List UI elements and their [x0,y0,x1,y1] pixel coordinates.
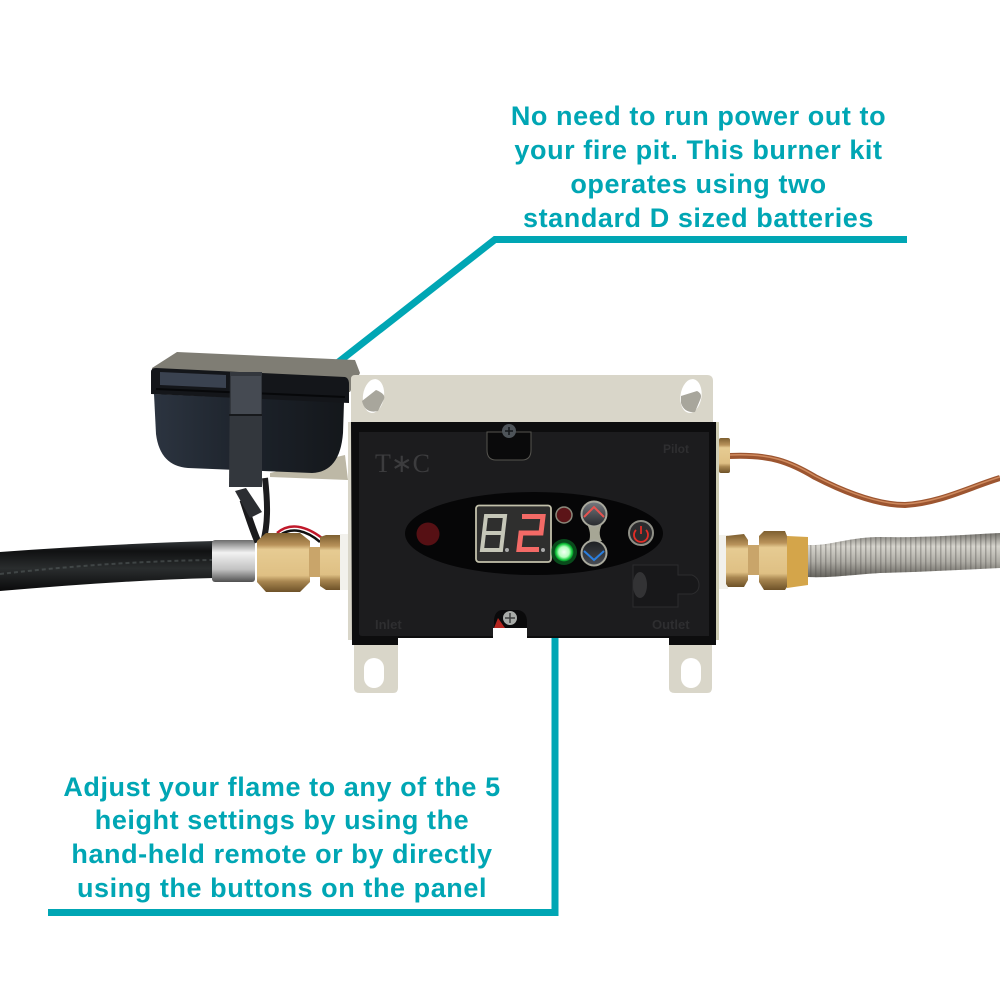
control panel housing [351,422,716,645]
callout text: batteries [511,101,886,233]
flexible stainless outlet line [808,533,1000,577]
control oval [405,492,663,575]
callout text: batteries: No need to run power out to [511,101,886,131]
rubber cover plug [633,565,699,607]
callout text: flame height: height settings by using the [95,805,469,835]
callout text: flame height: hand-held remote or by directly [71,839,493,869]
embossed logo and port labels: T∗C [375,449,430,478]
embossed logo and port labels [375,442,690,632]
small indicator light [556,507,572,523]
inlet brass fitting [257,533,350,592]
callout text: flame height [63,772,501,903]
embossed logo and port labels: Pilot [663,442,689,456]
mounting bracket [348,375,719,693]
green status led [551,539,577,565]
battery box [151,352,360,487]
up and down buttons [582,502,606,566]
power button [629,521,653,545]
battery box wires [235,478,322,542]
callout leader line: batteries [336,240,907,364]
callout text: flame height: using the buttons on the panel [77,873,487,903]
embossed logo and port labels: Outlet [652,617,690,632]
hose: black gas inlet [0,540,255,591]
callout leader line: flame height [48,638,555,912]
copper pilot tube [719,438,1000,505]
embossed logo and port labels: Inlet [375,617,402,632]
callout text: batteries: operates using two [570,169,827,199]
digital display [476,506,551,562]
callout text: batteries: your fire pit. This burner kit [514,135,883,165]
callout text: batteries: standard D sized batteries [523,203,874,233]
outlet brass fitting [719,531,808,590]
callout text: flame height: Adjust your flame to any of the 5 [63,772,501,802]
